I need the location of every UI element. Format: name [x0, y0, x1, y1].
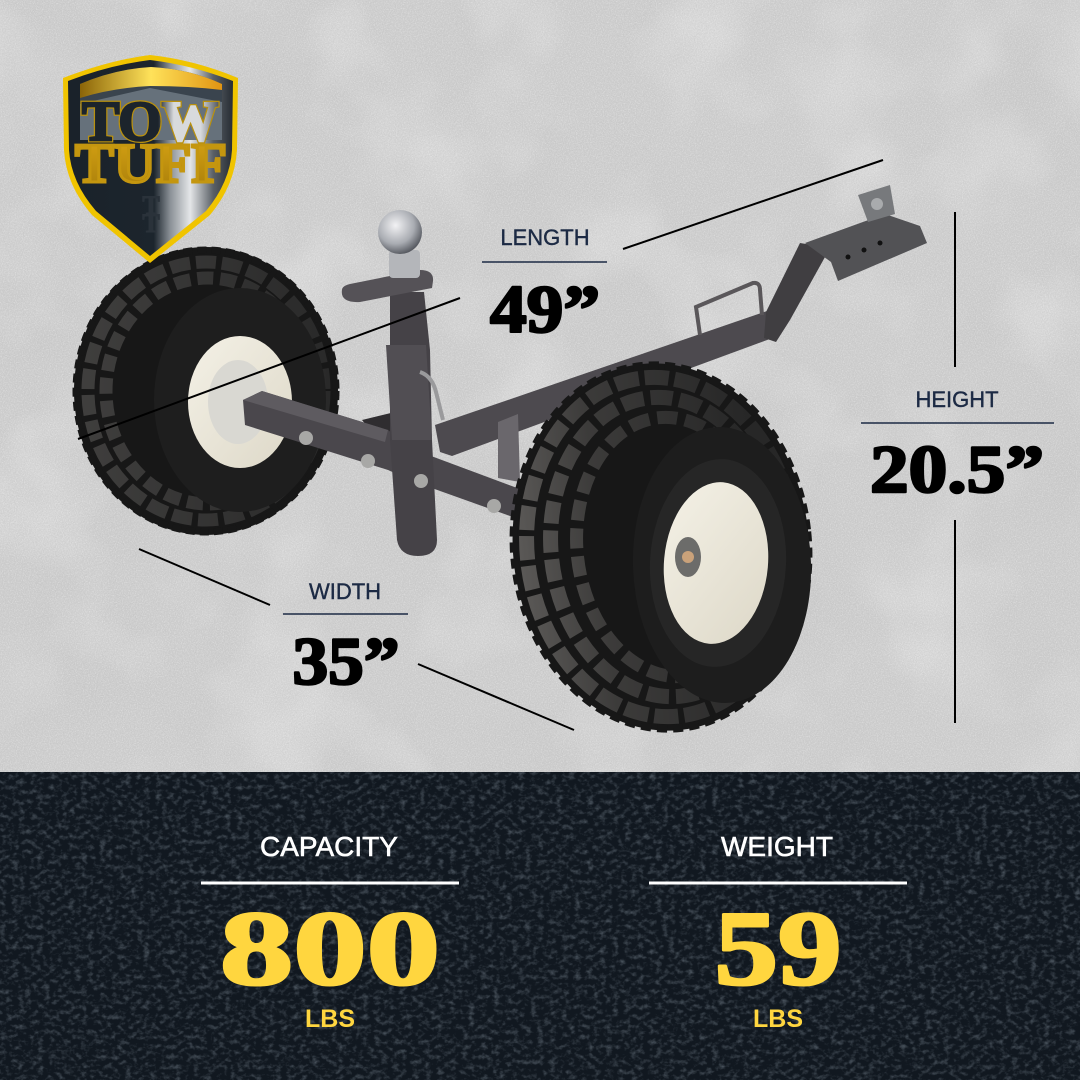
stat: capacity — [201, 831, 459, 1033]
safety hook — [420, 372, 443, 420]
product: tow dolly — [74, 185, 927, 745]
frame: axle tube — [243, 391, 528, 520]
weight unit: LBS — [753, 1005, 803, 1033]
stat: weight — [649, 831, 907, 1033]
dimension: length — [78, 160, 883, 439]
right wheel — [495, 349, 827, 745]
panel: dark textured footer — [0, 772, 1080, 1080]
weight label: WEIGHT — [721, 831, 833, 862]
frame: grab handle — [696, 283, 762, 335]
capacity unit: LBS — [305, 1005, 355, 1033]
background: concrete wall — [0, 0, 1080, 772]
logo: wordmark TOW: TOW — [82, 91, 218, 153]
bolts — [299, 431, 501, 513]
logo: wordmark TUFF: TUFF — [75, 133, 227, 195]
dimension: width — [139, 549, 574, 730]
frame: rear tube behind post — [362, 412, 395, 440]
logo: sunrise scene — [80, 67, 222, 140]
length label: LENGTH — [500, 225, 590, 250]
hitch plate — [342, 270, 433, 302]
coupler — [805, 185, 927, 281]
width value: 35” — [292, 623, 400, 699]
frame: vertical post — [390, 292, 437, 556]
height label: HEIGHT — [915, 387, 999, 412]
dimension: height — [861, 212, 1054, 723]
frame: tongue — [764, 243, 830, 342]
left wheel — [74, 247, 338, 535]
length value: 49” — [490, 271, 600, 347]
logo: wordmark TOW: TOW — [82, 91, 218, 153]
weight value: 59 — [714, 890, 842, 1007]
logo: Tow Tuff shield — [63, 55, 238, 263]
width label: WIDTH — [309, 579, 381, 604]
hitch ball — [378, 210, 422, 278]
frame: main beam — [435, 310, 778, 456]
logo: TT monogram top: T — [142, 191, 160, 220]
height value: 20.5” — [870, 431, 1044, 507]
capacity value: 800 — [220, 890, 440, 1007]
capacity label: CAPACITY — [260, 831, 398, 862]
logo: TT monogram bottom: T — [142, 209, 160, 238]
